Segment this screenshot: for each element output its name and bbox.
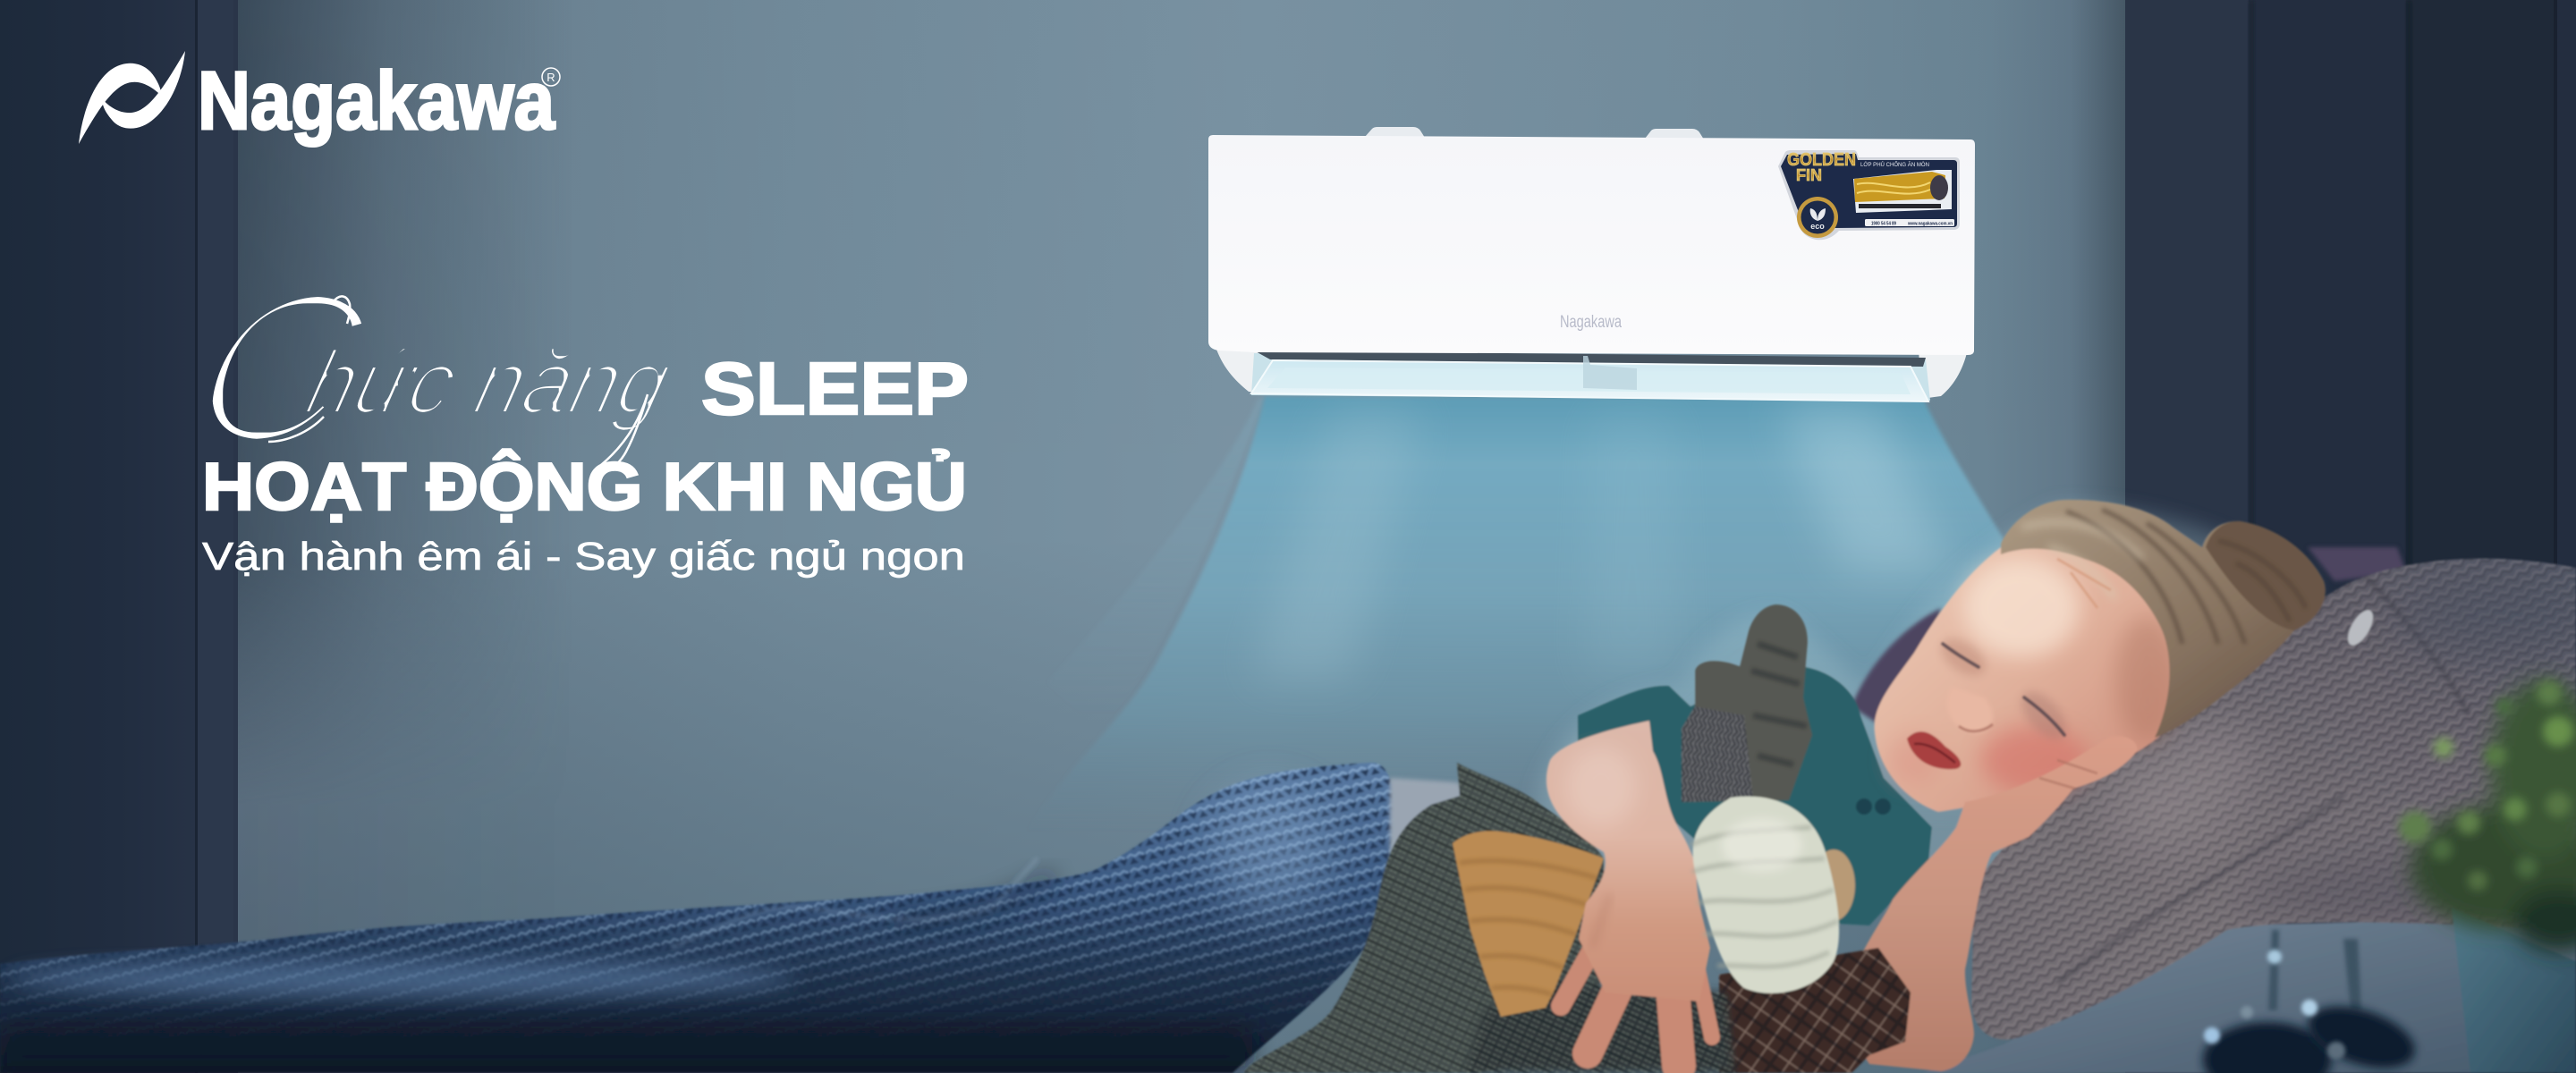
air conditioner unit [1208,127,1975,401]
light streak right [1780,407,1950,572]
plant foliage [2399,680,2576,952]
dark knit behind the hand [1467,984,1735,1073]
bed sheet [1923,917,2576,1073]
hair [2001,500,2326,738]
AC flap [1251,360,1928,401]
logo swoosh icon [79,51,185,144]
AC body [1208,135,1975,355]
sticker eco seal: eco [1810,222,1825,231]
AC opening [1251,353,1930,401]
closed eyes [1943,644,2064,735]
arm highlight [1565,747,1637,827]
right curtain [2125,0,2576,1073]
registered mark [542,68,560,86]
light streak middle [1583,411,1682,680]
clock highlights [2204,950,2345,1060]
left curtain [0,0,238,1073]
pillow button [2343,606,2378,649]
script heading: Chức năng [172,247,681,487]
background: bedroom wall [224,0,2138,1073]
hair strands [2066,510,2306,644]
sticker: Golden Fin [1778,150,1960,240]
sticker eco seal [1797,197,1838,238]
tagline: Vận hành êm ái - Say giấc ngủ ngon [202,535,965,579]
script heading: Chức năng: hức năng [298,332,681,433]
dark plaid toy body [1719,948,1911,1073]
light streak left [1252,411,1422,680]
heading: HOẠT ĐỘNG KHI NGỦ: HOẠT ĐỘNG KHI NGỦ [202,449,967,524]
sleeping child scene [0,500,2576,1073]
brand logo [79,51,560,147]
eye sockets [1935,631,1992,683]
white plush toy [1690,797,1839,993]
sticker heading: GOLDEN [1787,150,1856,170]
orange toy ear right [1812,849,1855,921]
AC dark slot [1254,351,1926,367]
toy horn [1682,604,1812,802]
plant pot [2452,908,2576,1073]
shirt buttons [1856,798,1891,815]
forehead highlight [1963,559,2080,657]
sticker mini AC [1853,170,1952,213]
sticker contact bar: 1900 54 54 89 [1871,222,1896,227]
orange toy belly [1453,831,1604,1017]
cheek blush [1981,726,2089,794]
alarm clock silhouette [2203,930,2422,1073]
hair bun [2206,521,2326,630]
arm and palm [1546,721,1710,1001]
face [1875,542,2183,812]
white bed strip between blanket and toy [1390,778,1476,858]
cold air flow from the air conditioner [1020,396,2023,841]
AC side caps [1215,344,1968,399]
logo wordmark: Nagakawa [198,55,555,147]
AC brand label: Nagakawa [1560,313,1622,332]
pillow [1959,545,2576,1055]
far arm under the cheek [1847,736,2137,1071]
mouth [1907,731,1961,769]
sticker subheading: FIN [1796,166,1822,184]
headline block [172,247,969,579]
heading: SLEEP: SLEEP [701,347,969,430]
script heading: Chức năng: C [172,247,389,487]
nose [1947,687,1993,733]
white halo around the child [1538,505,2317,894]
faint outer air fan [1047,396,1265,733]
sticker caption: LỚP PHỦ CHỐNG ĂN MÒN [1860,159,1929,168]
near arm and hand [1546,721,1712,1066]
main air stream [1020,396,2023,841]
fingers [1561,925,1712,1066]
sticker contact bar [1865,219,1954,227]
grey-green knitted toy [1244,763,1606,1073]
sticker contact bar: www.nagakawa.com.vn [1907,222,1953,227]
mauve cushion behind head [1852,547,2406,724]
blue knit blanket [0,763,1394,1073]
registered mark: R [547,71,555,84]
teal shirt [1578,666,1932,925]
AC mounting tabs [1365,127,1704,139]
